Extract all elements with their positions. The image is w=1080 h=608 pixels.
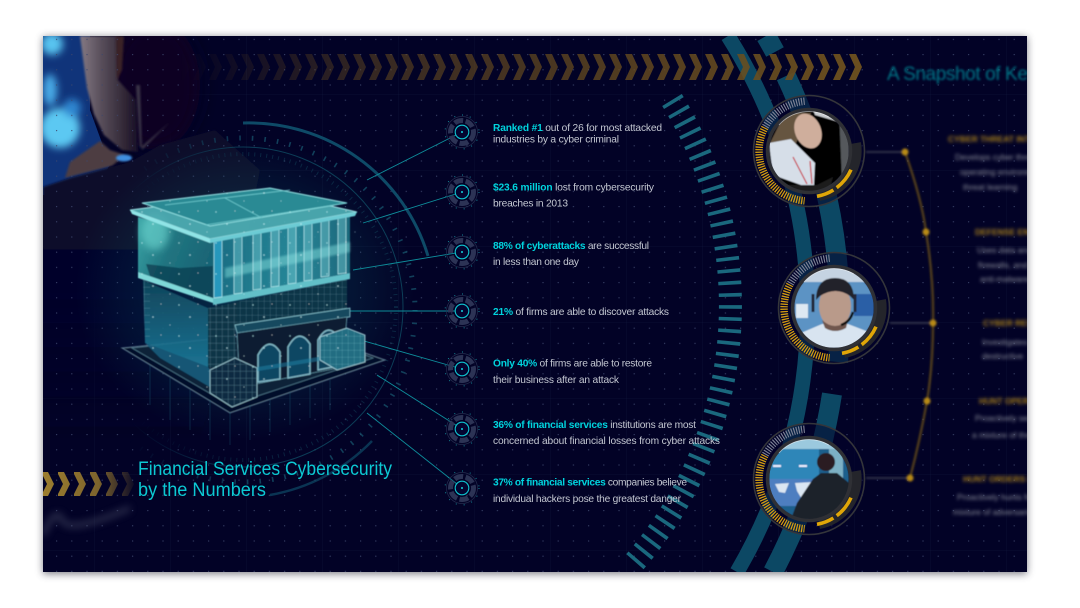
stat 2 text (493, 183, 654, 206)
columns (214, 215, 346, 298)
item: defense: anti-malware (980, 274, 1029, 284)
stat 5 text (493, 359, 652, 383)
item: hunt ops: a mixture of threat (972, 430, 1041, 440)
stat 5 text: their business after an attack (493, 375, 620, 386)
stat 2 text: breaches in 2013 (493, 198, 568, 210)
timeline nodes (902, 148, 936, 482)
item: cyber threat: Develops cyber threat (955, 152, 1038, 162)
item: hunt orders (953, 474, 1051, 517)
photo circle: man with headset (778, 252, 890, 364)
lower floor (142, 280, 348, 387)
base plate (122, 330, 385, 413)
roof (130, 188, 357, 243)
item: hunt ops: HUNT OPERATOR (979, 396, 1052, 406)
item: defense: DEFENSE ENGINEER (975, 227, 1062, 237)
upper floor (138, 213, 350, 305)
tick arc (632, 100, 730, 565)
icon: stat 4 (445, 294, 479, 328)
heading: Financial Services Cybersecurity (138, 459, 392, 480)
item: defense: Uses data analytics (977, 245, 1051, 255)
item: hunt orders: mixture of adversaries (953, 507, 1037, 517)
stat 7 text: 37% of financial services companies believe (493, 478, 687, 488)
photo circle: operator at world map screens (754, 424, 864, 534)
stat 4 text: 21% of firms are able to discover attacks (493, 307, 669, 318)
item: cyber threat: threat learning (963, 182, 1018, 192)
left wing (210, 358, 257, 407)
stat 2 text: $23.6 million lost from cybersecurity (493, 182, 655, 194)
stat 6 text: concerned about financial losses from cyber attacks (493, 436, 720, 447)
stat 6 text (493, 420, 720, 447)
stat icons (445, 115, 479, 505)
item: hunt ops (972, 396, 1053, 440)
stat 1 text: Ranked #1 out of 26 for most attacked (493, 123, 662, 134)
stat 3 text (493, 241, 649, 268)
stat 7 text (493, 478, 687, 505)
item: hunt orders: Proactively hunts for (957, 492, 1034, 502)
heading: by the Numbers (138, 480, 266, 501)
item: cyber response: Investigates (982, 337, 1027, 347)
icon: stat 1 (445, 115, 479, 149)
item: cyber threat: operating environment (960, 167, 1045, 177)
top chevron strip (180, 54, 864, 80)
photo circle: woman with lanyard (754, 96, 864, 206)
icon: stat 5 (445, 352, 479, 386)
heading (138, 459, 392, 501)
right wing (320, 328, 365, 370)
stat 7 text: individual hackers pose the greatest danger (493, 494, 682, 505)
connector lines from building to stats (350, 132, 462, 488)
building hologram (102, 163, 389, 445)
icon: stat 3 (445, 235, 479, 269)
reflection (150, 365, 330, 445)
item: cyber response: CYBER RESPONSE (983, 318, 1063, 328)
porch and arches (235, 308, 350, 387)
item: cyber threat (948, 134, 1045, 192)
icon: stat 7 (445, 471, 479, 505)
photo: man in profile with bokeh (43, 36, 260, 356)
item: cyber response: destructive (982, 351, 1023, 361)
stat texts (493, 123, 720, 505)
stat 3 text: in less than one day (493, 257, 580, 268)
item: defense (975, 227, 1062, 284)
bottom chevron strip (43, 472, 135, 496)
stat 5 text: Only 40% of firms are able to restore (493, 358, 652, 370)
thick teal arcs (728, 36, 840, 572)
blurred right column (887, 64, 1063, 517)
item: cyber response (982, 318, 1063, 361)
icon: stat 2 (445, 175, 479, 209)
icon: stat 6 (445, 412, 479, 446)
stat 1 text (493, 123, 662, 146)
item: cyber threat: CYBER THREAT INTEL (948, 134, 1041, 144)
timeline connector (866, 148, 936, 482)
item: hunt orders: HUNT ORDERS LEAD (963, 474, 1051, 484)
section title: A Snapshot of Key (887, 64, 1038, 85)
speckles (140, 192, 356, 399)
stat 1 text: industries by a cyber criminal (493, 134, 619, 146)
item: hunt ops: Proactively searches (975, 413, 1053, 423)
item: defense: firewalls, and (978, 260, 1028, 270)
smoke wisp (43, 508, 130, 535)
stat 6 text: 36% of financial services institutions are most (493, 420, 696, 431)
arcs around building (149, 121, 430, 496)
stat 3 text: 88% of cyberattacks are successful (493, 241, 649, 252)
